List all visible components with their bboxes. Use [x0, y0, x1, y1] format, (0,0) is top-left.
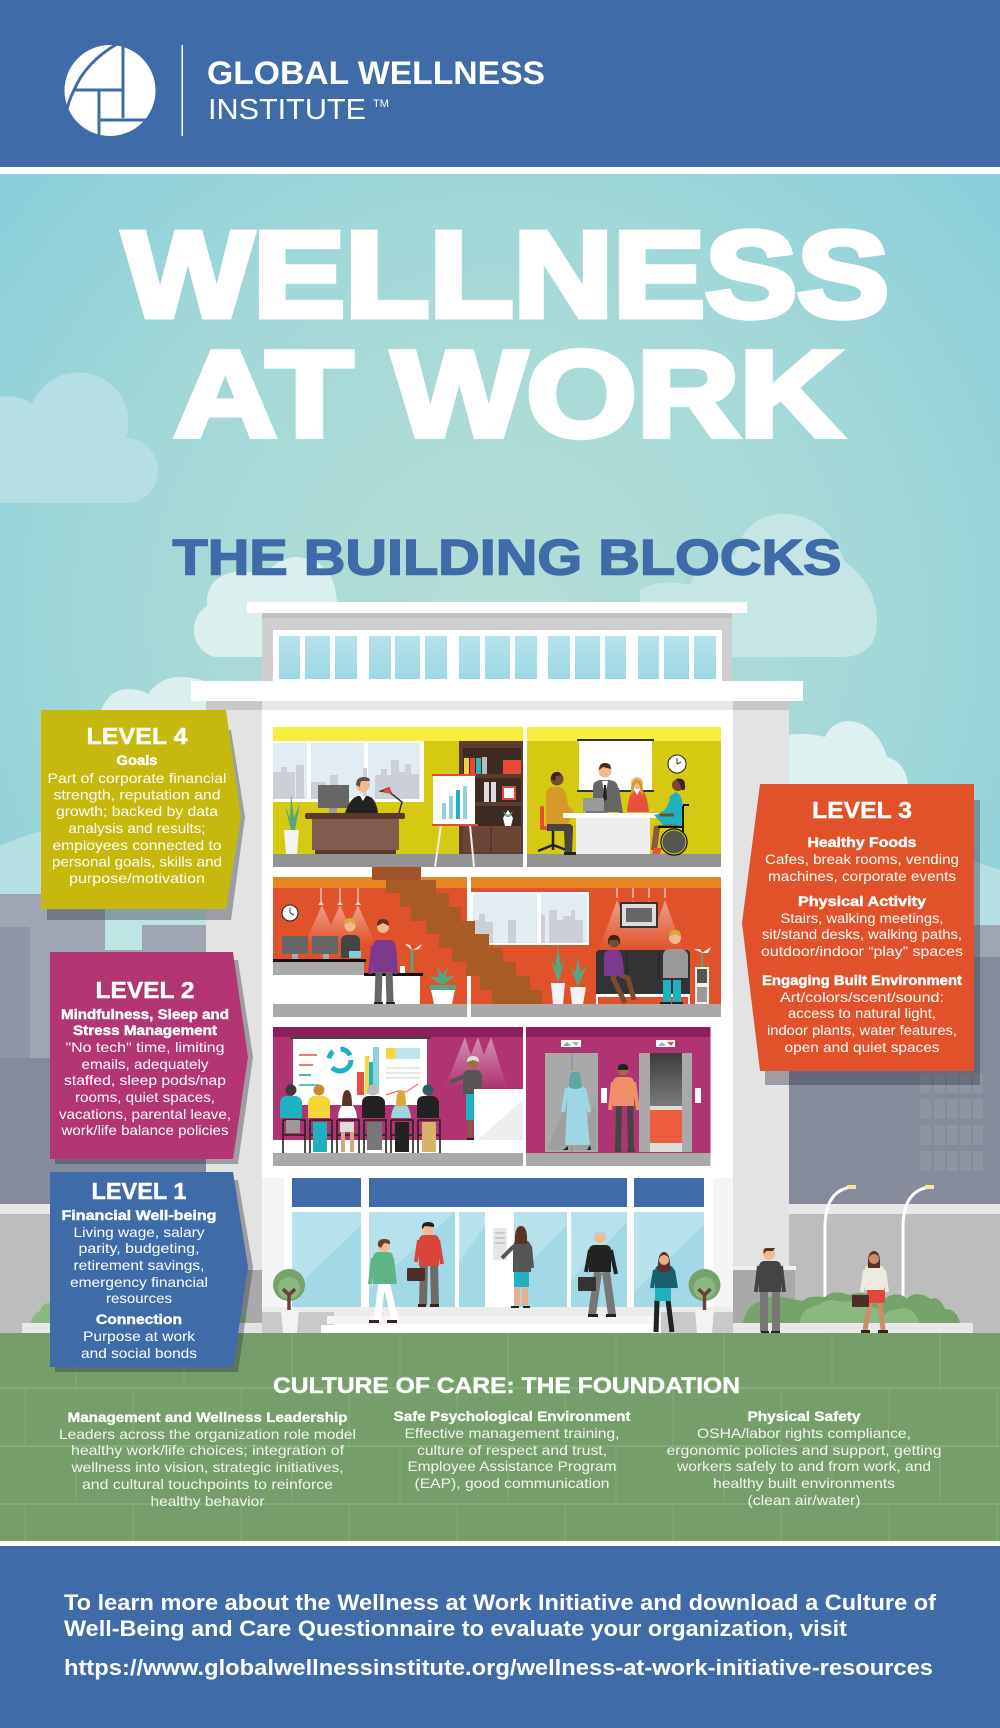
call panels and indicators: [601, 1040, 701, 1103]
foundation column: management and wellness leadership: [59, 1409, 356, 1509]
level 2 heading: LEVEL 2: [96, 977, 194, 1003]
staircase: [372, 867, 542, 1004]
organisation name: [207, 55, 545, 126]
small shelf with plant: [694, 947, 711, 1004]
foundation column: management and wellness leadership: Management and Wellness Leadership: [68, 1409, 348, 1425]
engaging built environment text: Art/colors/scent/sound:: [780, 989, 944, 1005]
wall clock: [668, 755, 686, 773]
engaging built environment text: [762, 972, 962, 1055]
lounge lights and framed picture: [599, 888, 683, 950]
financial well-being text: Connection: [96, 1311, 182, 1327]
potted plant: [284, 794, 300, 854]
financial well-being text: parity, budgeting,: [78, 1240, 200, 1256]
main title: WELLNESS: [123, 206, 889, 342]
ground: brick foundation: [0, 1333, 1000, 1546]
foundation column: physical safety: OSHA/labor rights compliance,: [697, 1425, 911, 1441]
clouds: [0, 372, 1000, 960]
foundation column: safe psychological environment: Employee Assistance Program: [408, 1458, 616, 1474]
penthouse windows: [279, 636, 716, 679]
goals text: growth; backed by data: [56, 803, 218, 819]
organisation name: TM: [373, 98, 389, 110]
mindfulness text: rooms, quiet spaces,: [75, 1089, 215, 1105]
financial well-being text: Living wage, salary: [74, 1224, 204, 1240]
panel: level 4 goals: [41, 710, 245, 920]
mindfulness text: staffed, sleep pods/nap: [64, 1072, 226, 1088]
resource url: https://www.globalwellnessinstitute.org/wellness-at-work-initiative-resources: [64, 1655, 933, 1680]
main title: [123, 206, 889, 462]
floor 2: presentation room: [273, 1027, 523, 1166]
woman in teal with boots: [652, 1252, 676, 1332]
floor 3: lounge: [471, 877, 721, 1017]
foundation column: safe psychological environment: Safe Psychological Environment: [394, 1408, 631, 1424]
organisation name: GLOBAL WELLNESS: [207, 55, 545, 91]
healthy foods text: machines, corporate events: [768, 868, 956, 884]
outdoor planter wall and bushes: [22, 1266, 973, 1333]
storefront signs: [292, 1178, 704, 1207]
plants in white pots: [550, 945, 587, 1004]
mindfulness text: [59, 1006, 231, 1138]
mindfulness text: "No tech" time, limiting: [66, 1039, 224, 1055]
financial well-being text: retirement savings,: [74, 1257, 204, 1273]
man in green shirt: [369, 1239, 397, 1323]
floor 4: meeting room: [527, 727, 721, 867]
older man with briefcase: [578, 1231, 616, 1317]
goals text: analysis and results;: [68, 820, 206, 836]
storefront windows: [292, 1212, 704, 1307]
mindfulness text: Stress Management: [73, 1022, 217, 1038]
engaging built environment text: Engaging Built Environment: [762, 972, 962, 988]
goals text: employees connected to: [52, 837, 222, 853]
man in purple sweater: [370, 919, 396, 1004]
foundation column: management and wellness leadership: wellness into vision, strategic initiatives,: [70, 1459, 344, 1475]
floor 4: executive office: [273, 727, 523, 867]
goals text: personal goals, skills and: [52, 854, 222, 870]
seated man in mustard sweater: [538, 772, 576, 855]
physical activity text: [761, 893, 963, 959]
bookshelf: [459, 741, 523, 854]
goals text: purpose/motivation: [69, 870, 205, 886]
healthy foods text: Cafes, break rooms, vending: [765, 851, 959, 867]
standing man in grey suit: [593, 763, 621, 814]
flip chart: [432, 774, 478, 867]
call to action: To learn more about the Wellness at Work Initiative and download a Culture of: [64, 1590, 937, 1615]
main title: AT WORK: [174, 326, 842, 462]
financial well-being text: Financial Well-being: [62, 1207, 216, 1223]
physical activity text: Physical Activity: [798, 893, 926, 909]
organisation name: INSTITUTE: [208, 94, 366, 126]
goals text: strength, reputation and: [54, 786, 220, 802]
logo divider: [182, 45, 183, 136]
foundation column: management and wellness leadership: and cultural touchpoints to reinforce: [82, 1476, 333, 1492]
woman in wheelchair: [651, 779, 689, 855]
man in dark sweater outdoors: [756, 1248, 784, 1334]
man in orange shirt waiting: [610, 1064, 638, 1152]
engaging built environment text: open and quiet spaces: [784, 1039, 940, 1055]
skyline: left buildings: [0, 894, 240, 1334]
level 3 heading: LEVEL 3: [812, 797, 912, 823]
woman with briefcase outdoors: [852, 1251, 888, 1333]
elevator left with woman in blue dress: [545, 1040, 598, 1152]
foundation column: management and wellness leadership: Leaders across the organization role model: [59, 1426, 356, 1442]
foundation column: physical safety: healthy built environments: [713, 1475, 895, 1491]
foundation column: safe psychological environment: [394, 1408, 631, 1491]
white lily plant: [400, 944, 422, 973]
sky background: [0, 174, 1000, 1334]
sofa: [596, 950, 690, 1004]
woman in red: [627, 777, 649, 812]
financial well-being text: emergency financial: [70, 1274, 208, 1290]
engaging built environment text: access to natural light,: [788, 1005, 936, 1021]
elevator right open: [639, 1053, 692, 1152]
man seated in grey: [660, 930, 688, 1004]
foundation column: management and wellness leadership: healthy behavior: [150, 1493, 265, 1509]
presentation board with charts: [290, 1037, 431, 1105]
foundation column: physical safety: ergonomic policies and support, getting: [666, 1442, 942, 1458]
foundation column: physical safety: workers safely to and from work, and: [676, 1458, 931, 1474]
meeting table: [563, 813, 662, 854]
foundation column: safe psychological environment: Effective management training,: [404, 1425, 620, 1441]
mindfulness text: vacations, parental leave,: [59, 1106, 231, 1122]
foundation heading: CULTURE OF CARE: THE FOUNDATION: [273, 1373, 740, 1398]
office window with skyline: [273, 741, 424, 802]
healthy foods text: [765, 834, 959, 884]
lounge window: [471, 892, 589, 945]
tree in pot left: [273, 1269, 305, 1333]
foundation column: physical safety: (clean air/water): [748, 1492, 860, 1508]
header band: [0, 0, 1000, 174]
woman at door panel: [502, 1226, 532, 1308]
physical activity text: sit/stand desks, walking paths,: [762, 926, 962, 942]
call to action: [64, 1590, 937, 1641]
street lamps: [825, 1185, 934, 1300]
floor 2: elevator lobby: [526, 1027, 710, 1166]
building structure: [191, 602, 803, 1333]
presenter at podium: [445, 1037, 523, 1140]
pendant lights: [304, 888, 376, 945]
financial well-being text: Purpose at work: [83, 1328, 196, 1344]
woman seated in purple: [604, 935, 634, 1003]
panel: level 3 healthy foods and activity: [742, 784, 980, 1085]
foundation column: physical safety: [666, 1408, 942, 1508]
goals text: Goals: [116, 752, 158, 768]
ground floor storefront: [262, 1178, 733, 1333]
floor 3: reception lobby: [273, 877, 467, 1017]
desk with computer and manager: [305, 777, 405, 854]
level 1 heading: LEVEL 1: [92, 1178, 187, 1204]
wall clock: [282, 905, 298, 921]
reception counter with monitors: [273, 936, 423, 1004]
engaging built environment text: indoor plants, water features,: [767, 1022, 957, 1038]
man in red sweater with briefcase: [407, 1222, 442, 1307]
tree in pot right: [688, 1269, 720, 1333]
foundation column: safe psychological environment: (EAP), good communication: [414, 1475, 610, 1491]
healthy foods text: Healthy Foods: [808, 834, 917, 850]
entrance steps: [262, 1307, 733, 1333]
financial well-being text: [62, 1207, 216, 1361]
financial well-being text: resources: [106, 1290, 172, 1306]
foundation column: safe psychological environment: culture of respect and trust,: [417, 1442, 607, 1458]
skyline: right buildings: [789, 925, 1000, 1334]
call to action: Well-Being and Care Questionnaire to evaluate your organization, visit: [64, 1616, 848, 1641]
physical activity text: outdoor/indoor “play” spaces: [761, 943, 963, 959]
financial well-being text: and social bonds: [81, 1345, 197, 1361]
audience members on chairs: [280, 1084, 440, 1153]
laptop on table: [583, 798, 608, 813]
mindfulness text: emails, adequately: [82, 1056, 208, 1072]
receptionist: [341, 918, 361, 958]
physical activity text: Stairs, walking meetings,: [780, 910, 944, 926]
foundation column: physical safety: Physical Safety: [748, 1408, 861, 1424]
goals text: Part of corporate financial: [48, 770, 226, 786]
footer band: [0, 1546, 1000, 1728]
logo mark: [64, 44, 156, 137]
level 4 heading: LEVEL 4: [86, 723, 188, 749]
goals text: [48, 752, 226, 886]
projection screen: [577, 739, 654, 792]
subtitle: THE BUILDING BLOCKS: [172, 528, 842, 586]
door panel: [493, 1228, 507, 1260]
potted succulent: [429, 966, 456, 1004]
foundation column: management and wellness leadership: healthy work/life choices; integration of: [71, 1442, 344, 1458]
mindfulness text: Mindfulness, Sleep and: [61, 1006, 229, 1022]
panel: level 1 financial well-being: [50, 1172, 253, 1372]
mindfulness text: work/life balance policies: [60, 1122, 228, 1138]
panel: level 2 mindfulness: [50, 952, 253, 1164]
